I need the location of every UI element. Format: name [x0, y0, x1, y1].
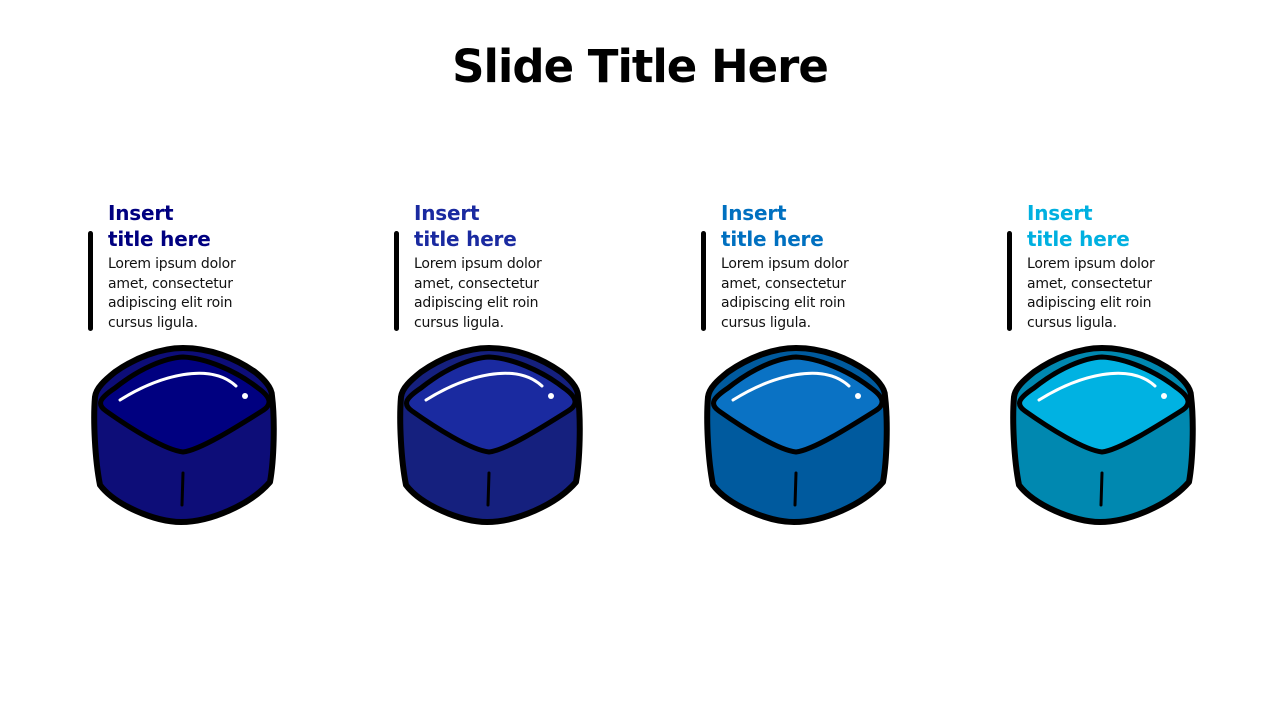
cube 4	[1013, 348, 1193, 522]
accent bar 1	[88, 231, 93, 331]
accent bar 4	[1007, 231, 1012, 331]
text block 3	[721, 201, 849, 330]
text block 4: cursus ligula.	[1027, 314, 1117, 330]
title: Slide Title Here	[452, 40, 828, 93]
text block 3: amet, consectetur	[721, 276, 846, 292]
text block 1: title here	[108, 227, 211, 251]
text block 1: amet, consectetur	[108, 276, 233, 292]
text block 2: amet, consectetur	[414, 276, 539, 292]
text block 4: amet, consectetur	[1027, 276, 1152, 292]
cube 1	[94, 348, 274, 522]
text block 4: Insert	[1027, 201, 1092, 225]
text block 4: adipiscing elit roin	[1027, 295, 1151, 311]
text block 1: cursus ligula.	[108, 314, 198, 330]
text block 1: adipiscing elit roin	[108, 295, 232, 311]
text block 1: Lorem ipsum dolor	[108, 256, 236, 272]
text block 3: title here	[721, 227, 824, 251]
cube 3	[707, 348, 887, 522]
text block 1	[108, 201, 236, 330]
text block 3: cursus ligula.	[721, 314, 811, 330]
accent bar 3	[701, 231, 706, 331]
text block 3: Insert	[721, 201, 786, 225]
text block 4	[1027, 201, 1155, 330]
text block 2: cursus ligula.	[414, 314, 504, 330]
cube 2	[400, 348, 580, 522]
text block 2: title here	[414, 227, 517, 251]
text block 2: Insert	[414, 201, 479, 225]
text block 2	[414, 201, 542, 330]
text block 2: adipiscing elit roin	[414, 295, 538, 311]
text block 3: adipiscing elit roin	[721, 295, 845, 311]
text block 2: Lorem ipsum dolor	[414, 256, 542, 272]
text block 3: Lorem ipsum dolor	[721, 256, 849, 272]
text block 1: Insert	[108, 201, 173, 225]
text block 4: Lorem ipsum dolor	[1027, 256, 1155, 272]
accent bar 2	[394, 231, 399, 331]
text block 4: title here	[1027, 227, 1130, 251]
